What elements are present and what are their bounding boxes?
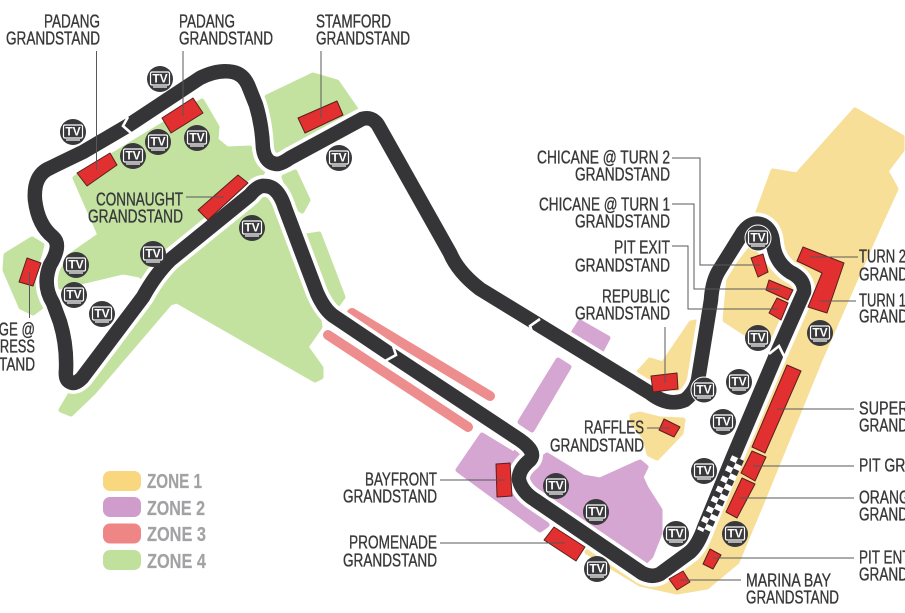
grandstand labels: RAFFLES [584, 418, 644, 438]
tv icons: TV [94, 307, 110, 321]
zone 1 areas (yellow) [587, 110, 902, 592]
grandstand labels: GRANDSTAND [316, 28, 410, 48]
grandstand labels: GRANDSTAND [575, 304, 670, 324]
tv icons: TV [727, 527, 743, 541]
grandstand labels: PIT EXIT [614, 238, 670, 258]
legend [103, 470, 206, 573]
tv icons: TV [589, 562, 605, 576]
grandstand labels: GRANDSTAND [179, 28, 273, 48]
tv icons: TV [331, 151, 347, 165]
tv icons: TV [588, 505, 604, 519]
grandstand labels: GRANDSTAND [343, 550, 437, 570]
tv icons: TV [696, 383, 712, 397]
grandstand labels: GRANDSTAND [88, 206, 183, 226]
race track [35, 71, 804, 576]
tv icons: TV [145, 247, 161, 261]
grandstand labels: CHICANE @ TURN 1 [539, 194, 670, 214]
grandstand labels: PROMENADE [349, 532, 437, 552]
tv icons: TV [244, 221, 260, 235]
legend: ZONE 4 [147, 550, 206, 573]
grandstand labels: GRANDSTAND [575, 256, 670, 276]
tv icons: TV [66, 288, 82, 302]
legend: ZONE 1 [147, 470, 202, 493]
tv icons [60, 66, 833, 582]
tv icons: TV [189, 131, 205, 145]
start/finish chequered section [700, 456, 741, 534]
zone 2 areas (purple) [458, 322, 660, 573]
tv icons: TV [750, 331, 766, 345]
grandstand labels: MARINA BAY [746, 570, 831, 590]
tv icons: TV [668, 527, 684, 541]
grandstand labels: GRANDSTAND [575, 212, 670, 232]
grandstand labels: CHICANE @ TURN 2 [537, 148, 670, 168]
leader lines [30, 51, 858, 580]
grandstand labels: GRANDSTAND [575, 164, 670, 184]
grandstand labels: GRANDSTAND [343, 486, 437, 506]
legend: ZONE 3 [147, 523, 206, 546]
tv icons: TV [548, 479, 564, 493]
grandstand labels: GRANDSTAND [6, 28, 100, 48]
legend: ZONE 2 [147, 497, 205, 520]
tv icons: TV [715, 415, 731, 429]
grandstands [19, 98, 844, 590]
tv icons: TV [731, 375, 747, 389]
tv icons: TV [65, 125, 81, 139]
grandstand labels: STAMFORD [316, 12, 391, 32]
grandstand labels: CONNAUGHT [96, 190, 183, 210]
tv icons: TV [150, 135, 166, 149]
tv icons: TV [152, 72, 168, 86]
tv icons: TV [696, 464, 712, 478]
tv icons: TV [125, 149, 141, 163]
direction arrows [123, 117, 785, 361]
grandstand labels: GRANDSTAND [550, 436, 644, 456]
zone 3 strips (pink) [328, 313, 490, 427]
zone 4 areas (green) [5, 75, 362, 414]
grandstand labels: PADANG [179, 12, 235, 32]
tv icons: TV [812, 326, 828, 340]
grandstand labels: BAYFRONT [365, 470, 437, 490]
grandstand labels: GRANDSTAND [746, 588, 839, 608]
grandstand labels: REPUBLIC [602, 286, 670, 306]
tv icons: TV [68, 258, 84, 272]
tv icons: TV [750, 231, 766, 245]
grandstand labels: PADANG [44, 12, 100, 32]
